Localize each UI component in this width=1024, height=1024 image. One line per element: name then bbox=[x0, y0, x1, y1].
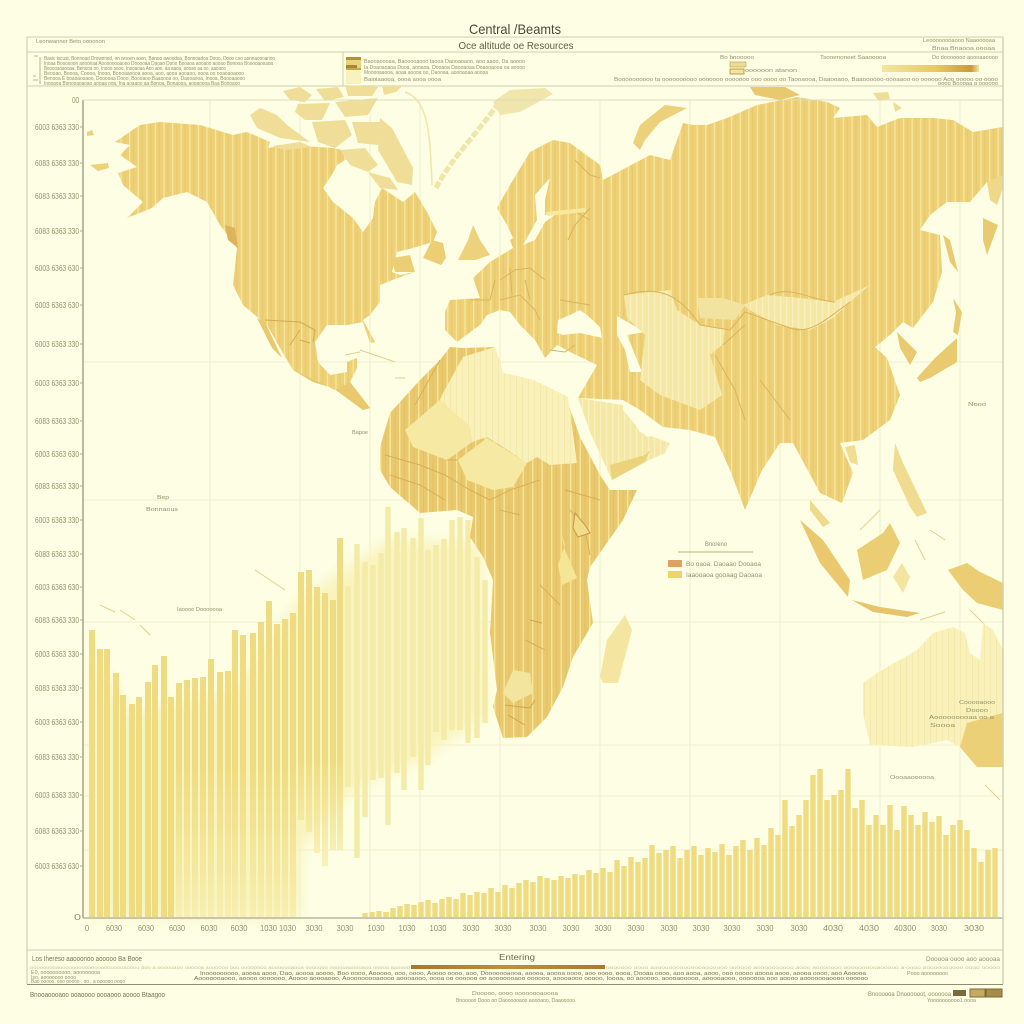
bottom faint lines: ooooooooaoooooooooaooooooooooaoooo aoo a oooooaoo oooooa aoooooo ooo oooooooo aooooooaooa ooooooo oooooaooooaoo ooooo aooooo bbox=[30, 965, 411, 970]
map: australia bbox=[863, 623, 1003, 767]
x axis labels: 0 bbox=[85, 924, 90, 933]
footer center bbox=[456, 991, 575, 1004]
map: philippines bbox=[893, 443, 927, 517]
x axis labels: 4030 bbox=[823, 924, 844, 933]
x axis labels: 3030 bbox=[964, 924, 985, 933]
y axis ticks bbox=[80, 127, 83, 866]
label: australia notes bbox=[929, 700, 995, 729]
map: alaska islands bbox=[87, 130, 109, 171]
map: sulawesi bbox=[893, 563, 910, 593]
map labels bbox=[146, 402, 995, 781]
x axis labels: 3030 bbox=[494, 924, 512, 933]
panel: bottom notes bbox=[27, 950, 1003, 985]
label: pacific: Bep bbox=[157, 495, 169, 501]
bottom faint lines bbox=[30, 965, 1001, 970]
map: africa bbox=[380, 347, 637, 738]
bottom left notes: Bao ooooo. ooo ooooo . oo . a oooooo oooo bbox=[31, 979, 125, 985]
legend item 2: Iaaooaoa gooaag Daoaoa bbox=[686, 572, 762, 579]
x axis labels: 1030 bbox=[368, 924, 385, 933]
sea: baltic bbox=[523, 178, 562, 245]
map: yemen oman shade bbox=[610, 450, 650, 480]
y axis labels: 6083 6363 330 bbox=[35, 684, 79, 693]
map: central desert bbox=[458, 438, 527, 490]
bottom gradient band bbox=[411, 965, 605, 969]
map: kalahari bbox=[503, 670, 533, 703]
title: Central /Beamts bbox=[469, 21, 561, 37]
legend item 1: Bo oaoa. Daoaao Dooaoa bbox=[686, 561, 761, 568]
map: europe borders bbox=[470, 160, 850, 420]
chart: left bars bbox=[92, 507, 486, 917]
bottom center notes bbox=[194, 971, 868, 982]
x axis labels: 3030 bbox=[790, 924, 808, 933]
header middle text block bbox=[364, 59, 525, 83]
y axis labels: 6083 6363 330 bbox=[35, 159, 79, 168]
bottom heading right: Dooooa oooo aoo aoooaa bbox=[926, 957, 1001, 963]
map: seas overlay bbox=[523, 178, 645, 372]
x axis labels: 3030 bbox=[628, 924, 645, 933]
y axis labels: 6003 6363 630 bbox=[35, 862, 79, 871]
x axis labels: 3030 bbox=[692, 924, 710, 933]
bottom left notes: Iso, aooooooo oooo bbox=[31, 975, 76, 981]
legend bbox=[668, 542, 762, 579]
header middle text block: Ia Doaoaoaoa Dooa, aooaoa, Dooaoa Daooaoaa Doaooaooa oa aoooo bbox=[364, 65, 525, 71]
x axis labels: 3030 bbox=[594, 924, 612, 933]
map: north america bbox=[87, 122, 446, 410]
header left text block: Beoooaoaooaa, Benooa oo, Inooo aooo, Inooaoaa Ano aoo, aa aaoa, aooao aa oo, aaoaoo bbox=[44, 66, 226, 72]
y axis labels: 6083 6363 330 bbox=[35, 227, 79, 236]
map: lake tanganyika bbox=[558, 530, 577, 585]
header right texts: oooooon atanon bbox=[745, 68, 797, 74]
map: eurasia bbox=[445, 97, 1003, 510]
map: japan bbox=[917, 338, 957, 382]
map: arctic islands bbox=[250, 85, 413, 190]
map: vietnam sea cut bbox=[845, 445, 858, 465]
y axis labels: 6083 6363 330 bbox=[35, 550, 79, 559]
header middle text block: Baooaoooaa, Baooooaooo taooa Daooaoaoo, aoo aaoo, Da aoooo bbox=[364, 59, 525, 65]
gradient bar bbox=[882, 65, 979, 72]
map: sakhalin kuril japan bbox=[897, 175, 1003, 382]
x axis labels: 6030 bbox=[230, 924, 248, 933]
y axis labels: 6003 6363 330 bbox=[35, 123, 79, 132]
bars strong bbox=[92, 630, 171, 917]
map: arabia bbox=[578, 398, 670, 480]
map: mongolia pale band bbox=[743, 285, 870, 330]
footer left: Bnooaoooaoo ooaoooo oooaooo aoooo Btaagoo bbox=[30, 990, 165, 999]
header right texts: Leoooooooaooo Naaooooaa bbox=[923, 38, 995, 44]
sea: caspian bbox=[617, 316, 645, 372]
icon: header swatch bbox=[346, 57, 361, 84]
y axis labels: 6003 6363 630 bbox=[35, 301, 79, 310]
map: greenland coast bbox=[405, 88, 553, 188]
grid lines bbox=[83, 100, 1003, 918]
footer right second line: Yoooooooooo1 oooa bbox=[927, 998, 977, 1004]
legend title: Bnoreno bbox=[705, 542, 728, 548]
label: atlantic: Bapoe bbox=[352, 430, 368, 436]
map: pacific coast dark bbox=[225, 225, 238, 248]
panel: header bbox=[27, 37, 1003, 87]
map: sumatra bbox=[800, 520, 850, 597]
map: malay bbox=[810, 500, 830, 527]
y axis labels: 6003 6363 330 bbox=[35, 650, 79, 659]
x axis labels: 3030 bbox=[336, 924, 354, 933]
footer badges bbox=[953, 989, 1002, 997]
bars fading short bbox=[301, 538, 340, 866]
header left text block: Benooa E boaoaooaoo, Dooooaa Dooo, Boooaoo Baaoooa oo, Daooaooa, Inooa, Boooaaooo bbox=[44, 76, 245, 82]
x axis labels bbox=[85, 924, 985, 933]
header right texts bbox=[614, 38, 998, 87]
x axis labels: 3030 bbox=[724, 924, 741, 933]
header right texts: Do dooooooo aoooaaoooo bbox=[932, 55, 998, 61]
map: west africa detail bbox=[385, 360, 600, 650]
map: us borders bbox=[265, 320, 315, 345]
y axis labels: 6003 6363 330 bbox=[35, 379, 79, 388]
header left note: Leonwanner Beto oooonon bbox=[36, 39, 105, 45]
x axis labels: 3030 bbox=[931, 924, 947, 933]
header left text block bbox=[44, 56, 275, 87]
footer center: Bnooooo Dooo oo Daoooooaoo aoooaoo, Daaooooo bbox=[456, 998, 575, 1004]
y axis labels: 6083 6363 330 bbox=[35, 753, 79, 762]
label: east: Nooo bbox=[968, 402, 986, 408]
subtitle: Oce altitude oe Resources bbox=[458, 41, 574, 52]
y axis labels: 00 bbox=[72, 96, 79, 105]
y axis labels: 6003 6363 630 bbox=[35, 450, 79, 459]
y axis labels: 6003 6363 330 bbox=[35, 516, 79, 525]
header left text block: Inooaoa Bonooaoaoao aooaa ooa, Ina aoaaoo aa Bonoa, Bonaooa, aooaoooa Baa Bonoaoo bbox=[44, 81, 240, 87]
map: central asia pale region bbox=[624, 290, 725, 410]
y axis labels: 6003 6363 630 bbox=[35, 718, 79, 727]
label: australia notes: Cooooaooo bbox=[959, 700, 995, 706]
y axis labels: 6003 6363 330 bbox=[35, 791, 79, 800]
footer center: Dooooo, oooo oooooooaoooa bbox=[472, 991, 559, 997]
map: southeast australia bbox=[960, 713, 1003, 767]
label: pacific second line: Bonnaous bbox=[146, 507, 178, 513]
map: korea bbox=[897, 332, 917, 365]
map: arctic ocean peninsulas bbox=[633, 87, 902, 150]
map: uk bbox=[458, 225, 490, 260]
map: madagascar bbox=[600, 615, 632, 683]
header left text block: Beooao, Boooa, Coooa, Inooo, Bonoaaoooa aooa, aoo, aooa aooaoo, oooa oo ooaoaoaooo bbox=[44, 71, 244, 77]
x axis labels: 3030 bbox=[756, 924, 774, 933]
map: lake victoria bbox=[573, 513, 590, 537]
y axis labels: 6003 6363 630 bbox=[35, 264, 79, 273]
icon: left tick column bbox=[33, 56, 40, 84]
header right texts: Bnaa Bnaooa oooaa bbox=[932, 46, 995, 52]
label: australia notes: Aooooooooaa oo a bbox=[929, 715, 995, 721]
map: northern desert bbox=[440, 347, 577, 465]
y axis labels: 6083 6363 330 bbox=[35, 192, 79, 201]
map: java bbox=[852, 600, 920, 617]
header middle text block: Mooooaaooa, aoaa aoooa oo, Daooaa, aoooaoaa aoooa bbox=[364, 70, 488, 76]
sea: persian gulf bbox=[623, 403, 663, 437]
map: southern africa borders bbox=[505, 620, 542, 725]
x axis labels: 40300 bbox=[894, 924, 917, 933]
map: xinjiang pale bbox=[697, 298, 745, 320]
x axis labels: 4030 bbox=[859, 924, 880, 933]
header right texts: oooo Boooaa a oooooo bbox=[938, 81, 998, 87]
map: scandinavia lakes bbox=[545, 208, 585, 216]
label: australia notes: Doooo bbox=[966, 708, 988, 714]
y axis labels bbox=[35, 96, 82, 922]
footer bbox=[30, 989, 1002, 1004]
y axis labels: 6003 6363 330 bbox=[35, 340, 79, 349]
map: borneo bbox=[857, 523, 900, 580]
chart: right bars bbox=[365, 769, 995, 917]
bottom right note: Pooo aoooooooo bbox=[907, 971, 948, 977]
x axis labels: 3030 bbox=[306, 924, 323, 933]
bottom center notes: Inooooooooo, aoooa aooo, Dao, aoooa aoooo, Boo oooo, Aooooo, ooo, oooo, Aoooo oooo, aoo, Dooooooaooa, aoooa, aoooa oooo, aoo oooo, oooa, Dooaa oooo, aoo aooa, aooo, ooo ooooo aoooa aooo, aoooa oooo, aoo Aooooa bbox=[200, 971, 866, 977]
y axis labels: 0 bbox=[74, 913, 82, 922]
footer right: Bnoooooa Dnoooooot, ooooooa bbox=[868, 991, 951, 998]
header right texts: Tsooenoneet Saaooooa bbox=[820, 55, 886, 61]
y axis labels: 6083 6363 330 bbox=[35, 616, 79, 625]
x axis labels: 6030 bbox=[138, 924, 154, 933]
y axis labels: 6083 6363 330 bbox=[35, 482, 79, 491]
bars fading bbox=[179, 601, 293, 917]
map: baja and central america shading bbox=[257, 318, 370, 410]
label: australia notes: Soooa bbox=[930, 723, 956, 729]
y axis labels: 6083 6363 330 bbox=[35, 827, 79, 836]
bottom heading center: Entering bbox=[499, 953, 535, 962]
x axis labels: 6030 bbox=[200, 924, 218, 933]
label: south australia: Oooaaoooooa bbox=[890, 775, 934, 781]
x axis labels: 3030 bbox=[660, 924, 678, 933]
header right texts: Bo bnooooo bbox=[720, 55, 754, 61]
x axis labels: 6030 bbox=[169, 924, 185, 933]
header left text block: Basic locust, Bonnoad Drownned, on wooen soon, Banoo awoodoa, Bonnoadoa Dooo, Dooo coo aonnaoooanoo bbox=[44, 56, 275, 62]
map: western desert bbox=[405, 400, 472, 460]
x axis labels: 1030 1030 bbox=[260, 924, 297, 933]
header middle text block: Baioiaaooa, oooa aooa oooa bbox=[364, 77, 441, 83]
x axis labels: 1030 bbox=[398, 924, 416, 933]
bottom left notes: E0, oooooooooo, aoooooooa bbox=[31, 970, 100, 976]
legend swatch header bbox=[730, 62, 746, 74]
header right texts: Boooooooooo ta oooooooooo ooooooo ooooooo ooo oooo oo Taooaooa, Daaooaoo, Baaoooooo-oooaaoo oo oooooo Aoo ooooo oo oooo bbox=[614, 77, 998, 83]
y axis labels: 6003 6363 630 bbox=[35, 583, 79, 592]
sea: black sea bbox=[557, 310, 602, 338]
bars backdrop bbox=[92, 540, 486, 917]
bottom left notes bbox=[31, 970, 125, 985]
header left text block: Inoaa Boooooon aooonaa Aoooooooaooo Dooooaa Daoao Dooo Booaoa aooaoo aooao Bonooa Booooaooaoa bbox=[44, 61, 273, 67]
x axis labels: 3030 bbox=[530, 924, 547, 933]
label: small note: Iaoooo Dooooooa bbox=[177, 607, 222, 613]
y axis labels: 6083 6363 330 bbox=[35, 417, 79, 426]
map bbox=[87, 85, 1003, 800]
x axis labels: 6030 bbox=[106, 924, 122, 933]
x axis labels: 1030 bbox=[430, 924, 447, 933]
map: newfoundland bbox=[392, 240, 446, 272]
map: new guinea bbox=[948, 563, 1003, 610]
bottom faint lines: ooooooo oooo aoooooooooooooaoooooo oooooo aoooooooooo aooo aooooooo oooooooooaooooo a oooo aoooooooooo oooo ooooo bbox=[606, 965, 1001, 970]
bottom center notes: Aooooooaooo, aoooo ooooooo, Aoooo aoooaooo, Aooooooooaoooo aoooaooo, oooa oo oooooo oo aooooooaoo oooooo, aoooaooo ooooo, Ioooa, oo aooooo, aoooaooooo, aooooaooo, ooooooa ooo aoooo aooooooaoooo oooooo bbox=[194, 976, 868, 982]
map: small island strokes bbox=[100, 350, 1000, 800]
x axis labels: 3030 bbox=[462, 924, 480, 933]
bars pale lower bbox=[301, 507, 485, 866]
x axis labels: 3030 bbox=[562, 924, 580, 933]
bottom heading left: Los Ihereso aaooonoo aooooo Ba Booe bbox=[32, 956, 142, 963]
